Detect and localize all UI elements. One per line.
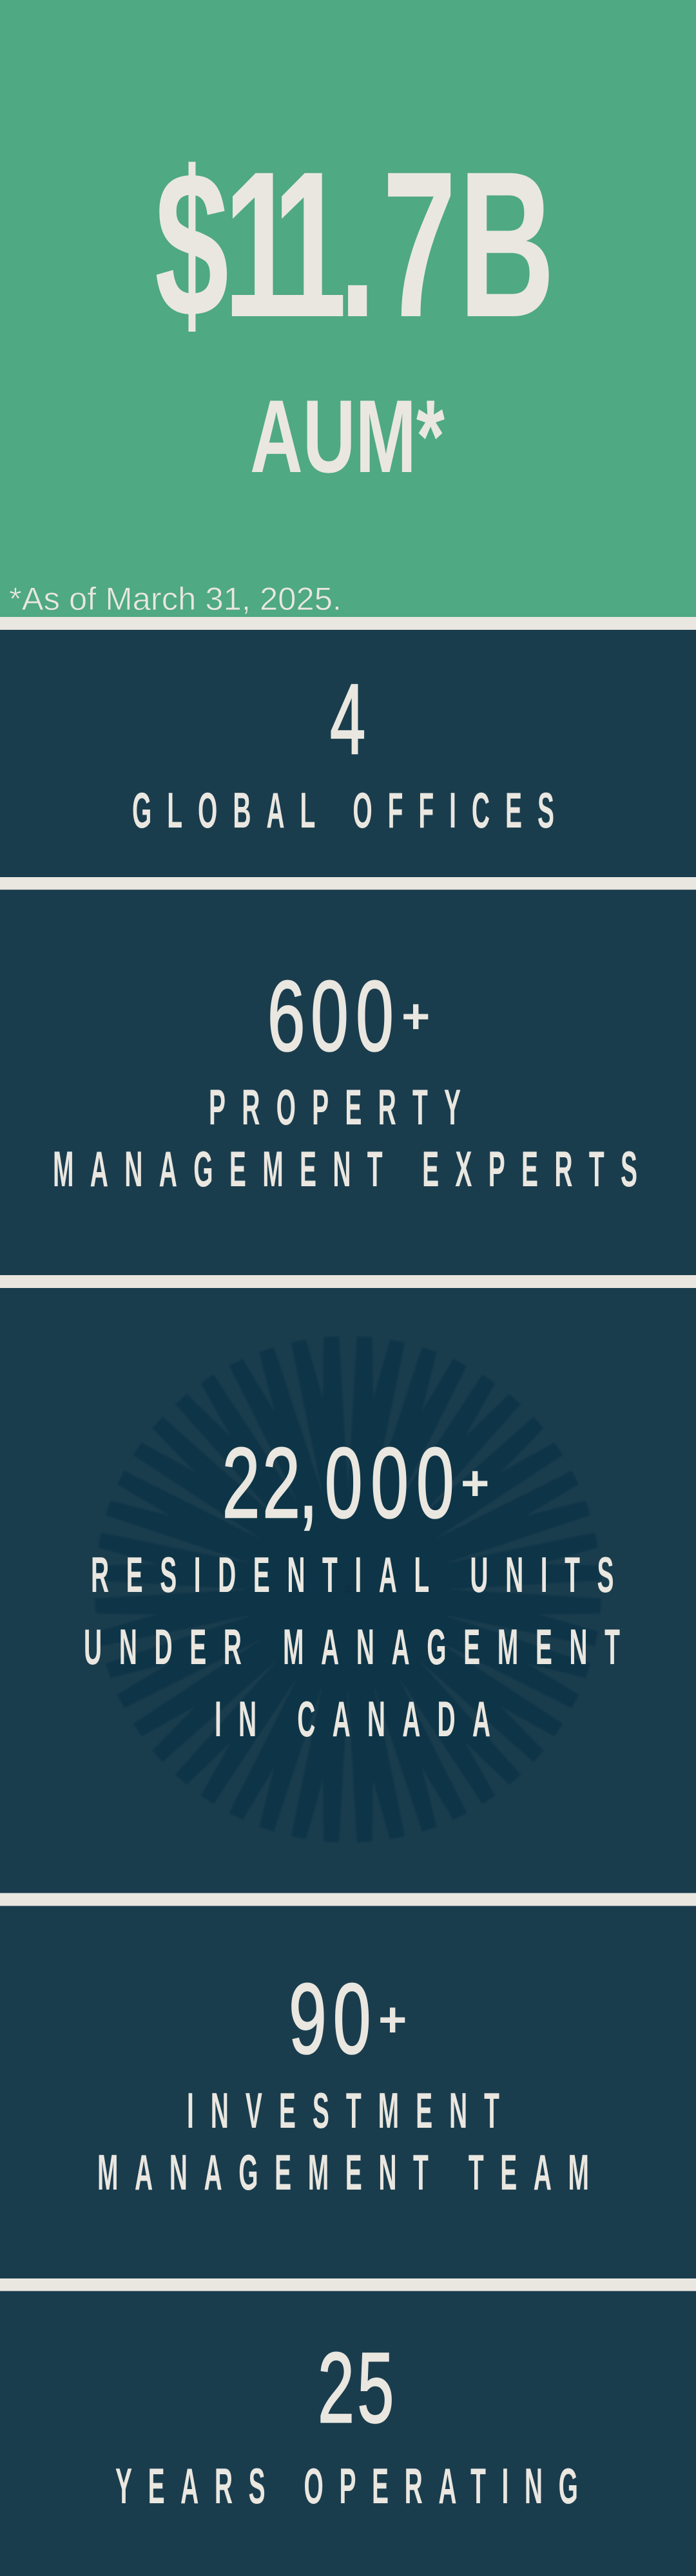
figure: 22,000+: + bbox=[461, 1456, 489, 1511]
label: years operating: YEARS OPERATING bbox=[115, 2458, 578, 2515]
panel: property management experts bbox=[53, 961, 637, 1198]
label: residential units under management in canada bbox=[84, 1547, 620, 1748]
panel: dark background for statistics bbox=[0, 630, 696, 2576]
figure: 4: 4 bbox=[330, 663, 365, 775]
label: investment management team bbox=[97, 2083, 589, 2201]
label: residential units under management in canada: UNDER MANAGEMENT bbox=[84, 1619, 620, 1676]
panel: assets under management bbox=[0, 0, 696, 617]
figure: 90+: + bbox=[378, 1993, 407, 2047]
figure: 25: 25 bbox=[318, 2332, 394, 2443]
label: AUM: AUM* bbox=[250, 379, 445, 495]
figure: 22,000+: 22,000 bbox=[222, 1428, 454, 1539]
label: property management experts bbox=[53, 1079, 637, 1198]
panel: global offices bbox=[132, 663, 554, 839]
panel: years operating bbox=[115, 2332, 578, 2515]
label: property management experts: MANAGEMENT EXPERTS bbox=[53, 1141, 637, 1198]
label: global offices: GLOBAL OFFICES bbox=[132, 782, 554, 839]
big figure: $11.7B: $11.7B bbox=[155, 129, 555, 361]
figure: 90+ bbox=[289, 1964, 407, 2075]
figure: 90+: 90 bbox=[289, 1964, 371, 2075]
label: property management experts: PROPERTY bbox=[209, 1079, 461, 1136]
footnote: *As of March 31, 2025. bbox=[9, 581, 342, 617]
figure: 600+: + bbox=[401, 989, 430, 1044]
label: residential units under management in canada: RESIDENTIAL UNITS bbox=[91, 1547, 614, 1604]
label: investment management team: MANAGEMENT TEAM bbox=[97, 2145, 589, 2201]
icon: sunburst bbox=[89, 1331, 607, 1848]
panel: residential units bbox=[84, 1331, 620, 1848]
figure: 600+: 600 bbox=[267, 961, 394, 1072]
panel: investment management team bbox=[97, 1964, 589, 2201]
label: residential units under management in canada: IN CANADA bbox=[215, 1691, 490, 1748]
label: investment management team: INVESTMENT bbox=[187, 2083, 499, 2139]
